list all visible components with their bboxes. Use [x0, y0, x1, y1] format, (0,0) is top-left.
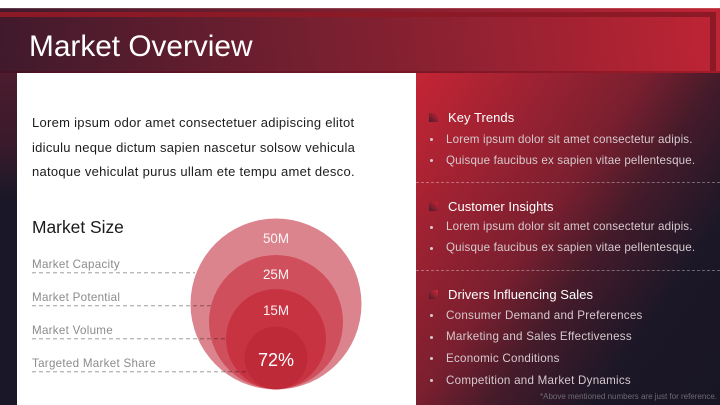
intro text: idiculu neque dictum sapien nascetur solsow vehicula — [32, 140, 355, 155]
intro text — [32, 115, 355, 179]
slide background — [0, 73, 17, 405]
heading: drivers influencing sales: Drivers Influencing Sales — [448, 287, 593, 302]
bullet — [430, 336, 433, 339]
label: market capacity: Market Capacity — [32, 258, 120, 271]
icon: customer insights — [429, 202, 438, 211]
driver 4: Competition and Market Dynamics — [446, 374, 631, 387]
circle: 15M — [226, 289, 326, 389]
bullet — [430, 226, 433, 229]
bullet — [430, 314, 433, 317]
divider 2 — [416, 270, 720, 271]
value: 50M: 50M — [263, 231, 289, 246]
value: 15M: 15M — [263, 303, 289, 318]
icon: key trends — [429, 113, 438, 122]
bullet — [430, 138, 433, 141]
panel: overview — [17, 73, 416, 405]
label: targeted market share: Targeted Market Share — [32, 357, 156, 370]
value: 72%: 72% — [258, 350, 294, 370]
header band — [0, 8, 720, 73]
bullet — [430, 247, 433, 250]
bullet — [430, 357, 433, 360]
bullet — [430, 379, 433, 382]
icon: drivers — [429, 290, 438, 299]
heading: market size: Market Size — [32, 217, 124, 237]
title: Market Overview — [29, 30, 253, 63]
footnote: *Above mentioned numbers are just for reference. — [540, 392, 717, 401]
intro text: natoque vehiculat purus ullam ete tempu amet desco. — [32, 164, 355, 179]
driver 2: Marketing and Sales Effectiveness — [446, 330, 632, 343]
label: market volume: Market Volume — [32, 324, 113, 337]
heading: customer insights: Customer Insights — [448, 199, 554, 214]
label: market potential: Market Potential — [32, 291, 120, 304]
driver 1: Consumer Demand and Preferences — [446, 309, 643, 322]
intro text: Lorem ipsum odor amet consectetuer adipiscing elitot — [32, 115, 354, 130]
key trend 2: Quisque faucibus ex sapien vitae pellentesque. — [446, 154, 695, 167]
insight 2: Quisque faucibus ex sapien vitae pellentesque. — [446, 241, 695, 254]
bullet — [430, 159, 433, 162]
key trend 1: Lorem ipsum dolor sit amet consectetur adipis. — [446, 133, 693, 146]
driver 3: Economic Conditions — [446, 352, 560, 365]
header top border — [0, 12, 716, 17]
panel: right column — [416, 73, 720, 405]
insight 1: Lorem ipsum dolor sit amet consectetur adipis. — [446, 220, 693, 233]
value: 25M: 25M — [263, 267, 289, 282]
header bottom edge — [0, 71, 720, 73]
divider 1 — [416, 182, 720, 183]
circle: 72% — [244, 326, 308, 390]
heading: key trends: Key Trends — [448, 110, 514, 125]
header right border — [710, 17, 716, 71]
circle: 50M — [190, 218, 362, 390]
header top highlight — [0, 8, 720, 9]
circle: 25M — [209, 255, 343, 389]
